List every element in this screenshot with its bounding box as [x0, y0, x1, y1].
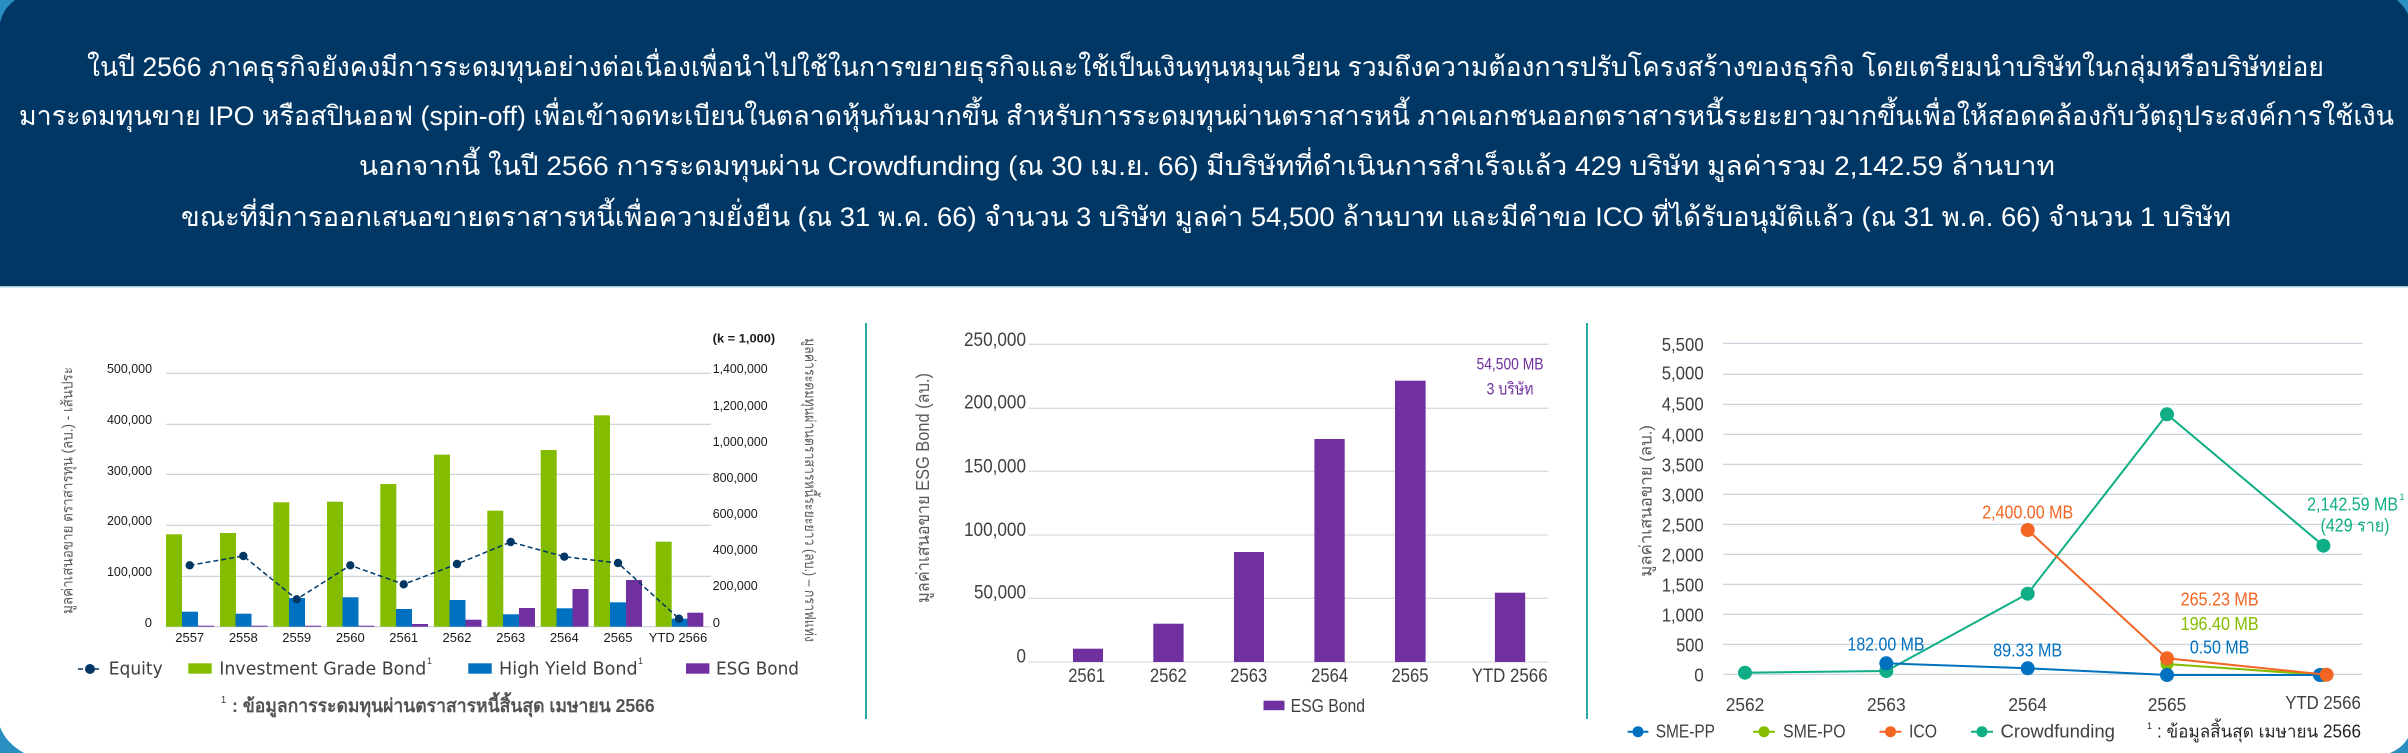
year labels: 2562 [1150, 665, 1187, 687]
header text block: มาระดมทุนขาย IPO หรือสปินออฟ (spin-off) เพื่อเข้าจดทะเบียนในตลาดหุ้นกันมากขึ้น สำหรับการระดมทุนผ่านตราสารหนี้ ภาคเอกชนออกตราสารหนี้ระยะยาวมากขึ้นเพื่อให้สอดคล้องกับวัตถุประสงค์การใช้เงิน [19, 96, 2394, 133]
year labels: 2564 [2008, 694, 2047, 715]
legend: ESG Bond [1291, 696, 1365, 716]
value axis labels: 500 [1676, 634, 1704, 656]
header text block [19, 48, 2394, 234]
equity dashed line [186, 538, 683, 623]
left axis labels: 500,000 [107, 361, 152, 376]
legend: High Yield Bond [499, 658, 638, 680]
value axis labels [1662, 334, 1704, 686]
footnote: : ข้อมูลสิ้นสุด เมษายน 2566 [2157, 719, 2361, 743]
category labels: 2564 [550, 630, 579, 645]
year labels: 2561 [1068, 665, 1105, 687]
right axis title: มูลค่าระดมทุนผ่านตราสารหนี้ระยะยาว (ลบ.) – กราฟแท่ง [800, 338, 821, 642]
category labels: YTD 2566 [649, 630, 707, 645]
callout: 2566 value: 54,500 MB [1476, 354, 1544, 374]
legend: ICO [1909, 722, 1937, 742]
right axis labels: 1,000,000 [713, 434, 768, 449]
header text block: นอกจากนี้ ในปี 2566 การระดมทุนผ่าน Crowdfunding (ณ 30 เม.ย. 66) มีบริษัทที่ดำเนินการสำเร็จแล้ว 429 บริษัท มูลค่ารวม 2,142.59 ล้านบาท [359, 146, 2055, 183]
value axis labels: 250,000 [964, 329, 1026, 351]
footnote: 1 [2147, 721, 2152, 731]
callout: 2566 value: 3 บริษัท [1486, 380, 1534, 398]
right axis labels [713, 331, 775, 630]
legend: 1 [638, 656, 643, 666]
callout: 2566 value [1476, 354, 1544, 398]
series: SME-PO [2160, 658, 2330, 682]
value axis labels: 2,000 [1662, 544, 1704, 566]
year labels: 2565 [2148, 694, 2186, 715]
category labels: 2562 [443, 630, 471, 645]
left axis labels: 0 [145, 615, 152, 630]
high yield bond bars [182, 597, 688, 627]
data labels [1848, 492, 2405, 660]
right axis labels: 1,400,000 [713, 361, 768, 376]
legend: SME-PO [1783, 722, 1846, 742]
left axis title: มูลค่าเสนอขาย ตราสารทุน (ลบ.) - เส้นประ [60, 367, 78, 614]
data labels: (429 ราย) [2320, 515, 2390, 535]
value axis labels: 200,000 [964, 392, 1026, 414]
right axis labels: 0 [713, 615, 720, 630]
value axis labels: 3,500 [1662, 454, 1704, 476]
legend: Equity [109, 658, 163, 680]
year labels: 2562 [1726, 694, 1764, 715]
footnote: : ข้อมูลการระดมทุนผ่านตราสารหนี้สิ้นสุด เมษายน 2566 [232, 692, 655, 718]
axis title: มูลค่าเสนอขาย (ลบ.) [1636, 425, 1656, 577]
data labels: 2,400.00 MB [1982, 502, 2073, 522]
value axis labels: 1,000 [1662, 604, 1704, 626]
legend: Investment Grade Bond [219, 658, 426, 680]
year labels: 2563 [1230, 665, 1267, 687]
legend: SME-PP [1656, 722, 1715, 742]
value axis labels: 3,000 [1662, 484, 1704, 506]
value axis labels: 5,000 [1662, 362, 1704, 384]
category labels: 2561 [389, 630, 418, 645]
year labels: 2564 [1311, 665, 1348, 687]
value axis labels: 0 [1016, 646, 1026, 668]
data labels: 2,142.59 MB [2307, 494, 2398, 514]
category labels: 2563 [496, 630, 525, 645]
left axis labels: 400,000 [107, 412, 152, 427]
legend: ESG Bond [716, 658, 799, 680]
legend: Crowdfunding [2000, 722, 2115, 742]
value axis labels: 2,500 [1662, 514, 1704, 536]
value axis labels: 1,500 [1662, 574, 1704, 596]
left axis labels: 100,000 [107, 564, 152, 579]
value axis labels: 150,000 [964, 456, 1026, 478]
divider two [1586, 323, 1588, 719]
header text block: ขณะที่มีการออกเสนอขายตราสารหนี้เพื่อความยั่งยืน (ณ 31 พ.ค. 66) จำนวน 3 บริษัท มูลค่า 54,500 ล้านบาท และมีคำขอ ICO ที่ได้รับอนุมัติแล้ว (ณ 31 พ.ค. 66) จำนวน 1 บริษัท [181, 197, 2231, 234]
right axis labels: 400,000 [713, 542, 758, 557]
right axis labels: (k = 1,000) [713, 331, 775, 345]
legend: 1 [427, 656, 432, 666]
right axis labels: 800,000 [713, 470, 758, 485]
legend [1628, 722, 2115, 742]
panel: capital raising combo chart [60, 331, 821, 718]
left axis labels [107, 361, 152, 630]
category labels: 2559 [282, 630, 311, 645]
bottom corner accents [0, 727, 2408, 753]
category labels [175, 630, 707, 645]
category labels: 2560 [336, 630, 365, 645]
data labels: 182.00 MB [1848, 634, 1924, 654]
year labels: 2565 [1392, 665, 1429, 687]
axis title: มูลค่าเสนอขาย ESG Bond (ลบ.) [913, 373, 934, 603]
header panel [0, 0, 2408, 288]
right axis labels: 600,000 [713, 506, 758, 521]
data labels: 196.40 MB [2181, 614, 2259, 634]
divider one [865, 323, 867, 719]
year labels [1068, 665, 1548, 687]
value axis labels [964, 329, 1026, 668]
data labels: 0.50 MB [2190, 637, 2249, 657]
year labels: YTD 2566 [2285, 692, 2361, 713]
right axis labels: 200,000 [713, 578, 758, 593]
series: ICO [2021, 523, 2334, 682]
header text block: ในปี 2566 ภาคธุรกิจยังคงมีการระดมทุนอย่างต่อเนื่องเพื่อนำไปใช้ในการขยายธุรกิจและใช้เป็นเงินทุนหมุนเวียน รวมถึงความต้องการปรับโครงสร้างของธุรกิจ โดยเตรียมนำบริษัทในกลุ่มหรือบริษัทย่อย [87, 48, 2324, 84]
legend [1264, 696, 1365, 716]
footnote: 1 [221, 695, 227, 706]
legend [78, 656, 799, 680]
series: Crowdfunding [1738, 407, 2330, 680]
investment grade bond bars [166, 415, 672, 627]
category labels: 2558 [229, 630, 258, 645]
data labels: 265.23 MB [2181, 589, 2259, 609]
esg bars [1073, 381, 1525, 662]
year labels [1726, 692, 2361, 715]
left axis labels: 200,000 [107, 513, 152, 528]
value axis labels: 5,500 [1662, 334, 1704, 355]
value axis labels: 4,500 [1662, 394, 1704, 414]
value axis labels: 0 [1694, 664, 1704, 686]
right axis labels: 1,200,000 [713, 398, 768, 413]
series: SME-PP [1879, 656, 2327, 682]
value axis labels: 4,000 [1662, 424, 1704, 446]
panel: SME and crowdfunding line chart [1628, 334, 2405, 743]
left axis labels: 300,000 [107, 463, 152, 478]
category labels: 2565 [604, 630, 632, 645]
year labels: 2563 [1867, 694, 1906, 715]
year labels: YTD 2566 [1472, 665, 1548, 687]
value axis labels: 50,000 [974, 582, 1026, 604]
esg bond bars [198, 580, 703, 627]
value axis labels: 100,000 [964, 519, 1026, 541]
category labels: 2557 [175, 630, 204, 645]
data labels: 89.33 MB [1993, 640, 2062, 660]
data labels: 1 [2399, 492, 2405, 502]
panel: ESG bond bar chart [913, 329, 1549, 716]
